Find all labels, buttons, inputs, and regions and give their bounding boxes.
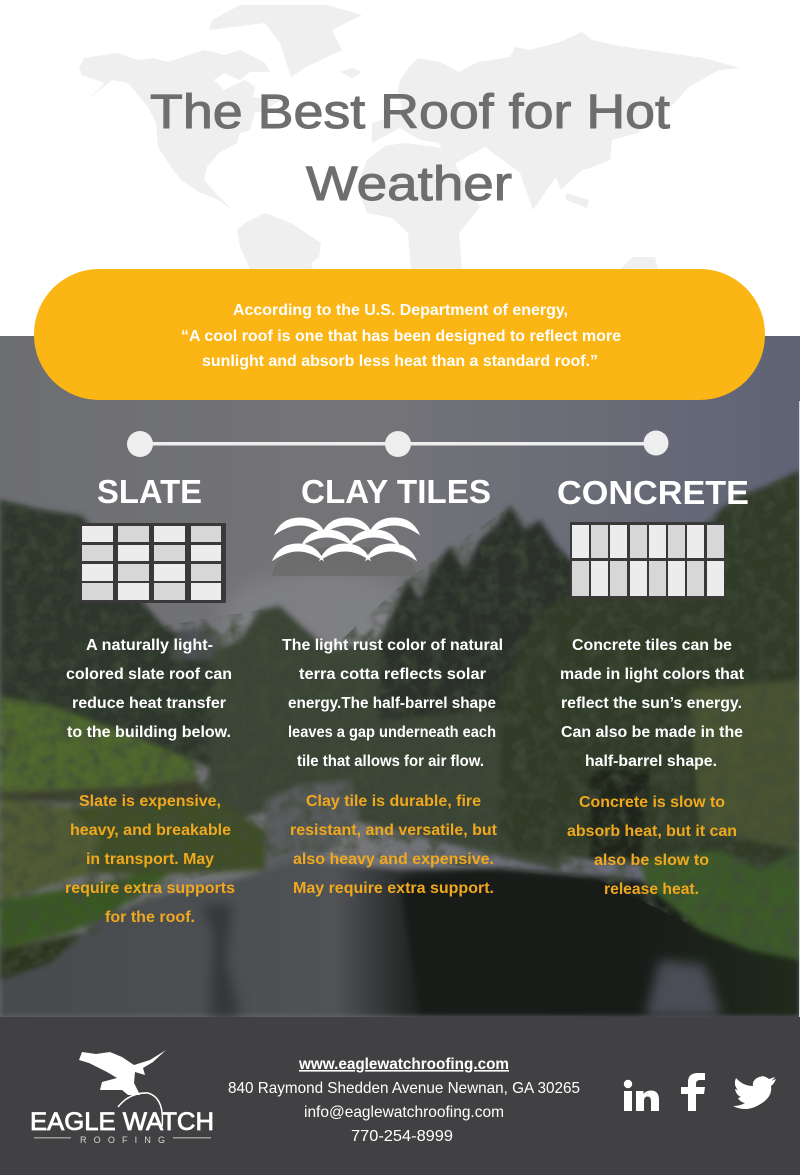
clay tiles drawbacks: resistant, and versatile, but: [290, 822, 498, 839]
icon: linkedin: [624, 1080, 659, 1111]
clay tiles description: terra cotta reflects solar: [299, 666, 486, 683]
slate description: [66, 637, 232, 741]
clay tiles drawbacks: May require extra support.: [293, 880, 494, 897]
quote text: [181, 302, 621, 370]
clay tiles drawbacks: Clay tile is durable, fire: [306, 793, 481, 810]
concrete drawbacks: absorb heat, but it can: [567, 823, 737, 840]
title: [150, 86, 670, 211]
concrete description: reflect the sun’s energy.: [561, 695, 742, 712]
slate description: to the building below.: [67, 724, 231, 741]
icon: facebook: [681, 1073, 705, 1111]
slate description: A naturally light-: [86, 637, 213, 654]
clay tiles description: leaves a gap underneath each: [288, 724, 496, 741]
icon: clay barrel tiles: [272, 518, 419, 576]
logo: Eagle Watch Roofing: [30, 1050, 214, 1145]
clay tiles drawbacks: [290, 793, 498, 897]
concrete description: half-barrel shape.: [585, 753, 717, 770]
slate drawbacks: [65, 793, 235, 926]
icon: concrete tiles: [570, 522, 725, 599]
slate drawbacks: require extra supports: [65, 880, 235, 897]
icon: eagle: [79, 1050, 166, 1095]
clay tiles description: [282, 637, 503, 770]
timeline connector: [127, 430, 668, 457]
title: Weather: [306, 158, 512, 211]
concrete drawbacks: also be slow to: [594, 852, 709, 869]
contact details: 840 Raymond Shedden Avenue Newnan, GA 30265: [228, 1080, 580, 1097]
concrete description: Concrete tiles can be: [572, 637, 732, 654]
clay tiles description: tile that allows for air flow.: [297, 753, 484, 770]
concrete drawbacks: [567, 794, 737, 898]
clay tiles description: energy.The half-barrel shape: [288, 695, 496, 712]
logo: Eagle Watch Roofing: ROOFING: [80, 1135, 165, 1145]
background photo: river valley: [0, 336, 800, 1017]
slate drawbacks: for the roof.: [105, 909, 195, 926]
footer bar: [0, 1017, 800, 1175]
icon: twitter: [733, 1076, 776, 1109]
clay tiles description: The light rust color of natural: [282, 637, 503, 654]
slate drawbacks: in transport. May: [86, 851, 214, 868]
icon: slate tiles: [78, 523, 226, 603]
quote text: “A cool roof is one that has been designed to reflect more: [181, 328, 621, 345]
concrete description: [560, 637, 745, 770]
heading: clay tiles: CLAY TILES: [301, 473, 491, 510]
concrete drawbacks: Concrete is slow to: [579, 794, 725, 811]
quote text: According to the U.S. Department of energy,: [233, 302, 568, 319]
heading: slate: SLATE: [97, 473, 202, 510]
slate drawbacks: heavy, and breakable: [70, 822, 231, 839]
quote text: sunlight and absorb less heat than a standard roof.”: [202, 353, 598, 370]
world map watermark: [79, 5, 740, 269]
contact details: info@eaglewatchroofing.com: [304, 1104, 504, 1121]
orange quote pill: [34, 269, 765, 400]
concrete description: Can also be made in the: [561, 724, 743, 741]
concrete description: made in light colors that: [560, 666, 745, 683]
contact details: www.eaglewatchroofing.com: [298, 1056, 509, 1073]
slate description: colored slate roof can: [66, 666, 232, 683]
slate drawbacks: Slate is expensive,: [79, 793, 221, 810]
logo: Eagle Watch Roofing: EAGLE WATCH: [30, 1108, 214, 1136]
heading: concrete: CONCRETE: [557, 474, 749, 511]
contact details: 770-254-8999: [351, 1128, 453, 1145]
title: The Best Roof for Hot: [150, 86, 670, 139]
contact details: [228, 1056, 580, 1145]
slate description: reduce heat transfer: [72, 695, 226, 712]
concrete drawbacks: release heat.: [604, 881, 699, 898]
clay tiles drawbacks: also heavy and expensive.: [293, 851, 494, 868]
